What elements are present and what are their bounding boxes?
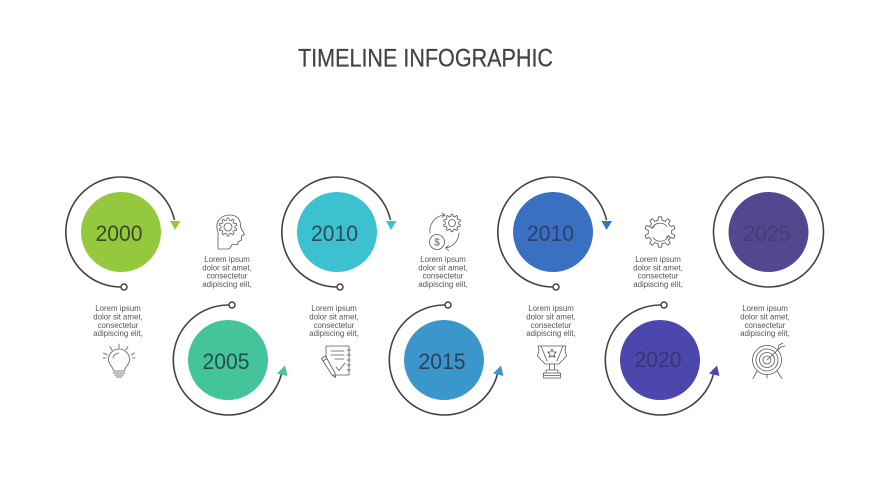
text block: 2020: adipiscing elit,: [633, 280, 683, 289]
progress ring: [605, 305, 714, 415]
panel: 2000 milestone: [66, 177, 180, 290]
ring end dot: [337, 284, 343, 290]
text block: 2000: adipiscing elit,: [93, 329, 143, 338]
text block: 2005: consectetur: [207, 272, 248, 281]
arrowhead: [277, 366, 288, 376]
progress ring: [498, 177, 606, 287]
text block: 2015: adipiscing elit,: [418, 280, 468, 289]
text block: 2010 second: consectetur: [531, 321, 572, 330]
arrowhead: [709, 366, 720, 376]
text block: 2010: consectetur: [314, 321, 355, 330]
text block: 2010 second: adipiscing elit,: [526, 329, 576, 338]
text block: 2020: consectetur: [638, 272, 679, 281]
text block: 2010: adipiscing elit,: [309, 329, 359, 338]
year label: 2020: [634, 347, 682, 372]
text block: 2010: Lorem ipsum: [311, 304, 357, 313]
icon: money and gear cycle: $: [434, 238, 440, 248]
year circle: [404, 320, 484, 400]
text block: 2015: consectetur: [423, 272, 464, 281]
text block: 2025: Lorem ipsum: [742, 304, 788, 313]
icon: target with arrow: [752, 343, 785, 378]
text block: 2005: Lorem ipsum: [204, 255, 250, 264]
year circle: [81, 192, 161, 272]
text block: 2015: dolor sit amet,: [418, 263, 468, 272]
panel: 2020 milestone: [605, 302, 720, 415]
year label: 2015: [418, 349, 466, 374]
year label: 2005: [202, 349, 250, 374]
ring end dot: [445, 302, 451, 308]
panel: 2015 milestone: [389, 302, 504, 415]
panel: 2010 milestone: [282, 177, 396, 290]
icon: head with gear: [217, 215, 244, 249]
progress ring: [173, 305, 282, 415]
arrowhead: [170, 221, 180, 230]
text block: 2000: dolor sit amet,: [93, 312, 143, 322]
year circle: [728, 192, 808, 272]
year circle: [297, 192, 377, 272]
year label: 2010: [527, 221, 574, 246]
arrowhead: [386, 221, 396, 230]
text block: 2025: consectetur: [745, 321, 786, 330]
year circle: [513, 192, 593, 272]
text block: 2020: dolor sit amet,: [633, 263, 683, 272]
year circle: [188, 320, 268, 400]
text block: 2015: Lorem ipsum: [420, 255, 466, 264]
text block: 2005: dolor sit amet,: [202, 263, 252, 272]
icon: gear with cycle arrows: [644, 217, 676, 247]
year label: 2025: [744, 221, 790, 246]
title: TIMELINE INFOGRAPHIC: [298, 44, 553, 72]
text block: 2010: dolor sit amet,: [309, 312, 359, 322]
ring end dot: [661, 302, 667, 308]
arrowhead: [493, 366, 504, 376]
text block: 2010 second: dolor sit amet,: [526, 312, 576, 322]
panel: 2025 milestone: [714, 177, 824, 287]
icon: checklist and pen: [322, 346, 350, 378]
ring end dot: [121, 284, 127, 290]
year label: 2010: [311, 221, 358, 246]
text block: 2025: adipiscing elit,: [740, 329, 790, 338]
text block: 2025: dolor sit amet,: [740, 312, 790, 322]
progress ring: [389, 305, 498, 415]
ring end dot: [553, 284, 559, 290]
text block: 2010 second: Lorem ipsum: [528, 304, 574, 313]
text block: 2020: Lorem ipsum: [635, 255, 681, 264]
text block: 2000: consectetur: [98, 321, 139, 330]
ring end dot: [229, 302, 235, 308]
year circle: [620, 320, 700, 400]
year label: 2000: [96, 221, 142, 246]
text block: 2000: Lorem ipsum: [95, 304, 141, 313]
icon: money and gear cycle: [430, 213, 461, 250]
panel: 2010 second milestone: [498, 177, 612, 290]
arrowhead: [602, 221, 612, 230]
icon: trophy: [538, 346, 566, 378]
progress ring: [66, 177, 174, 287]
icon: light bulb: [103, 344, 135, 377]
progress ring: [282, 177, 390, 287]
panel: 2005 milestone: [173, 302, 288, 415]
text block: 2005: adipiscing elit,: [202, 280, 252, 289]
outer ring: [714, 177, 824, 287]
